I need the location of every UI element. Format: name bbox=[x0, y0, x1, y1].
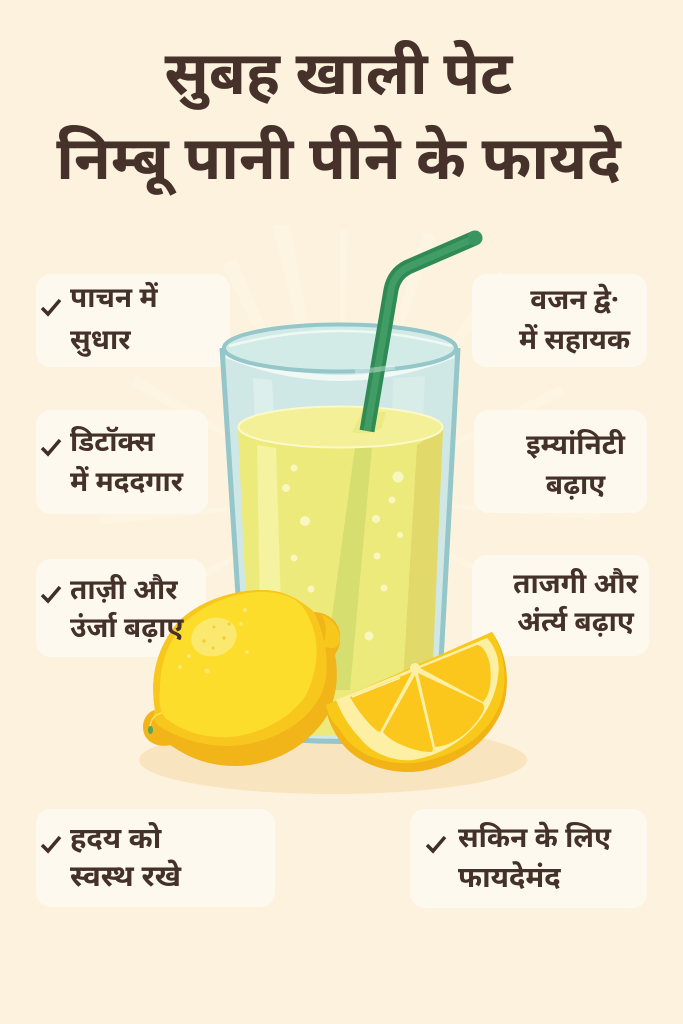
card: digestion: पाचन में bbox=[70, 283, 158, 319]
card: weight bbox=[472, 274, 647, 367]
title: सुबह खाली पेट bbox=[165, 41, 512, 119]
card: detox: डिटॉक्स bbox=[70, 427, 155, 463]
card: immunity: बढ़ाए bbox=[546, 470, 605, 506]
card: immunity: इम्यांनिटी bbox=[526, 430, 625, 466]
card: detox bbox=[36, 410, 208, 514]
card: skin bbox=[410, 809, 647, 908]
text: freshness and energy: उंर्जा बढ़ाए bbox=[70, 613, 183, 649]
card: freshness and energy bbox=[36, 559, 206, 657]
card: heart: हदय को bbox=[70, 822, 161, 860]
card: immunity bbox=[474, 410, 647, 513]
text: freshness and energy: ताज़ी और bbox=[70, 575, 178, 611]
card: weight: में सहायक bbox=[519, 325, 630, 361]
card: digestion: सुधार bbox=[70, 325, 131, 361]
card: heart: स्वस्थ रखे bbox=[70, 860, 181, 899]
card: freshness and vitality: अंर्त्य बढ़ाए bbox=[517, 607, 634, 643]
title: निम्बू पानी पीने के फायदे bbox=[56, 126, 621, 204]
card: freshness and vitality bbox=[472, 555, 649, 656]
card: weight: वजन द्वे· bbox=[530, 285, 619, 321]
card: freshness and vitality: ताजगी और bbox=[513, 569, 638, 605]
table shadow bbox=[139, 726, 527, 794]
card: skin: सकिन के लिए bbox=[458, 823, 611, 859]
title bbox=[56, 40, 622, 204]
straw bbox=[355, 230, 482, 431]
card: heart bbox=[36, 809, 275, 907]
card: digestion bbox=[36, 274, 230, 367]
card: detox: में मददगार bbox=[70, 467, 183, 503]
lemon bbox=[143, 590, 340, 766]
lemon wedge bbox=[326, 632, 507, 772]
text: freshness and energy bbox=[70, 574, 184, 649]
glass bbox=[222, 324, 458, 742]
lemonade bbox=[238, 406, 443, 736]
card: skin: फायदेमंद bbox=[458, 861, 561, 899]
